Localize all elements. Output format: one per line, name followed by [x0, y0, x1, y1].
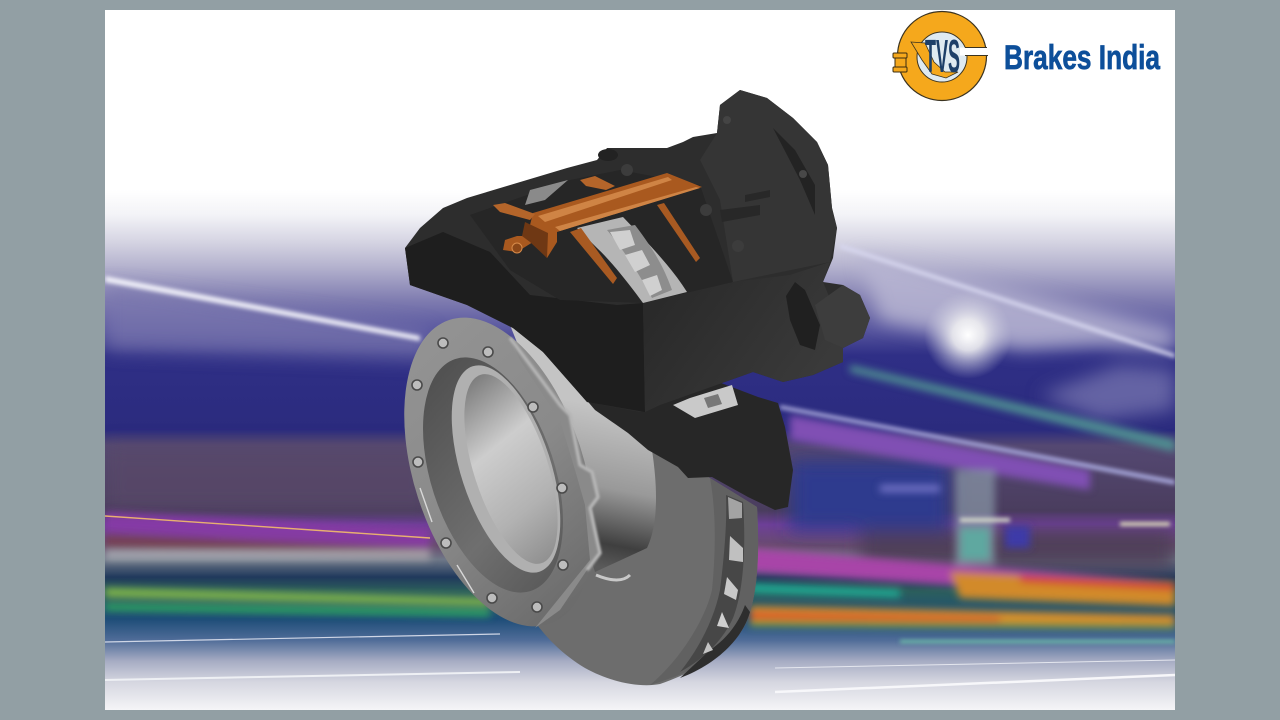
rotor vented rim: [650, 478, 758, 685]
brake disc rotor: [535, 400, 758, 685]
flange inner recess: [396, 340, 590, 610]
brake caliper body: [405, 90, 870, 412]
rotor segment under caliper: [673, 385, 738, 418]
logo emblem: TVS: [925, 30, 960, 82]
caliper top recess: [470, 170, 733, 303]
port fitting: [786, 282, 820, 350]
cylinder housing: [700, 90, 837, 282]
flange lugs: [510, 338, 600, 628]
hub flange: [369, 294, 629, 650]
hub bolt detail: [596, 575, 630, 580]
guide pin bolts: [621, 164, 744, 252]
wheel hub cylinder: [510, 325, 656, 572]
caliper front face: [405, 232, 645, 412]
caliper lower arm: [540, 345, 793, 510]
exposed rotor in caliper window: [525, 180, 687, 303]
flange bolts: [412, 338, 568, 612]
logo: Brakes India: [893, 12, 1161, 100]
hub bowl: [430, 352, 582, 586]
logo wordmark: Brakes India: [1004, 39, 1161, 77]
logo emblem: [893, 12, 990, 100]
orange pad retainer bracket: [493, 173, 702, 284]
